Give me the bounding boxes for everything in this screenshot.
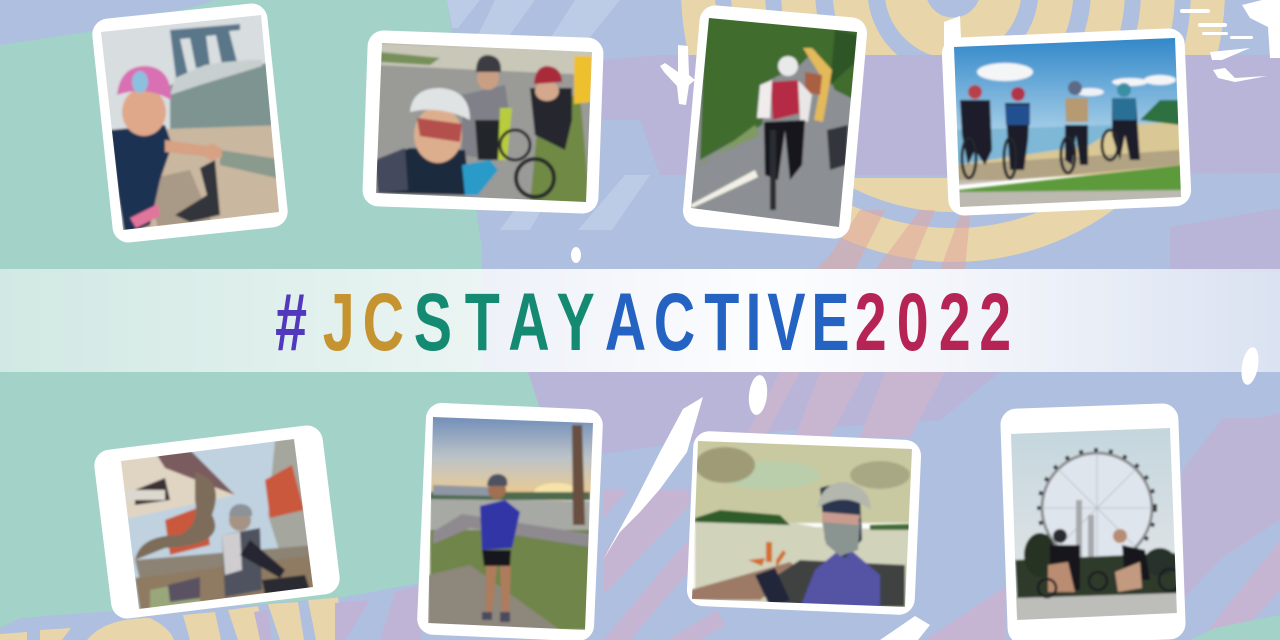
paint splashes	[571, 0, 1280, 640]
title: #JCSTAYACTIVE2022: STAY	[414, 276, 595, 367]
photo 3: cyclist on tree-lined road	[682, 4, 868, 240]
lavender lower middle	[528, 372, 1000, 454]
lavender bottom stripes	[254, 585, 422, 640]
photo 4: four cyclists at the beach	[941, 28, 1192, 216]
concentric yellow arcs	[698, 0, 1208, 245]
panel: title band	[0, 269, 1280, 372]
pink stripes under arcs	[815, 210, 970, 270]
photo 6: woman in blue jersey at sunset by the lake	[417, 402, 603, 640]
photo 1: woman with pink helmet at Marina Bay	[91, 2, 290, 244]
photo 8: two cyclists at the Singapore Flyer	[1000, 403, 1186, 640]
title: #JCSTAYACTIVE2022: J	[323, 276, 355, 367]
photo 2: three cyclists selfie	[362, 30, 604, 214]
photo 7: person in purple hijab by the water	[686, 431, 922, 615]
lavender diagonal stripes lower	[603, 489, 1005, 640]
yellow arcs bottom left	[0, 596, 342, 640]
lavender area lower right	[1182, 413, 1280, 600]
title: #JCSTAYACTIVE2022: C	[363, 276, 404, 367]
title: #JCSTAYACTIVE2022: 2022	[855, 276, 1011, 367]
light diagonal stripes at top	[447, 0, 650, 230]
title: #JCSTAYACTIVE2022: #	[275, 276, 307, 367]
title: #JCSTAYACTIVE2022: ACTIVE	[605, 276, 850, 367]
photo 5: cyclist with dragon statue	[92, 424, 342, 620]
teal area	[0, 0, 540, 628]
lavender band top right	[600, 55, 1280, 175]
